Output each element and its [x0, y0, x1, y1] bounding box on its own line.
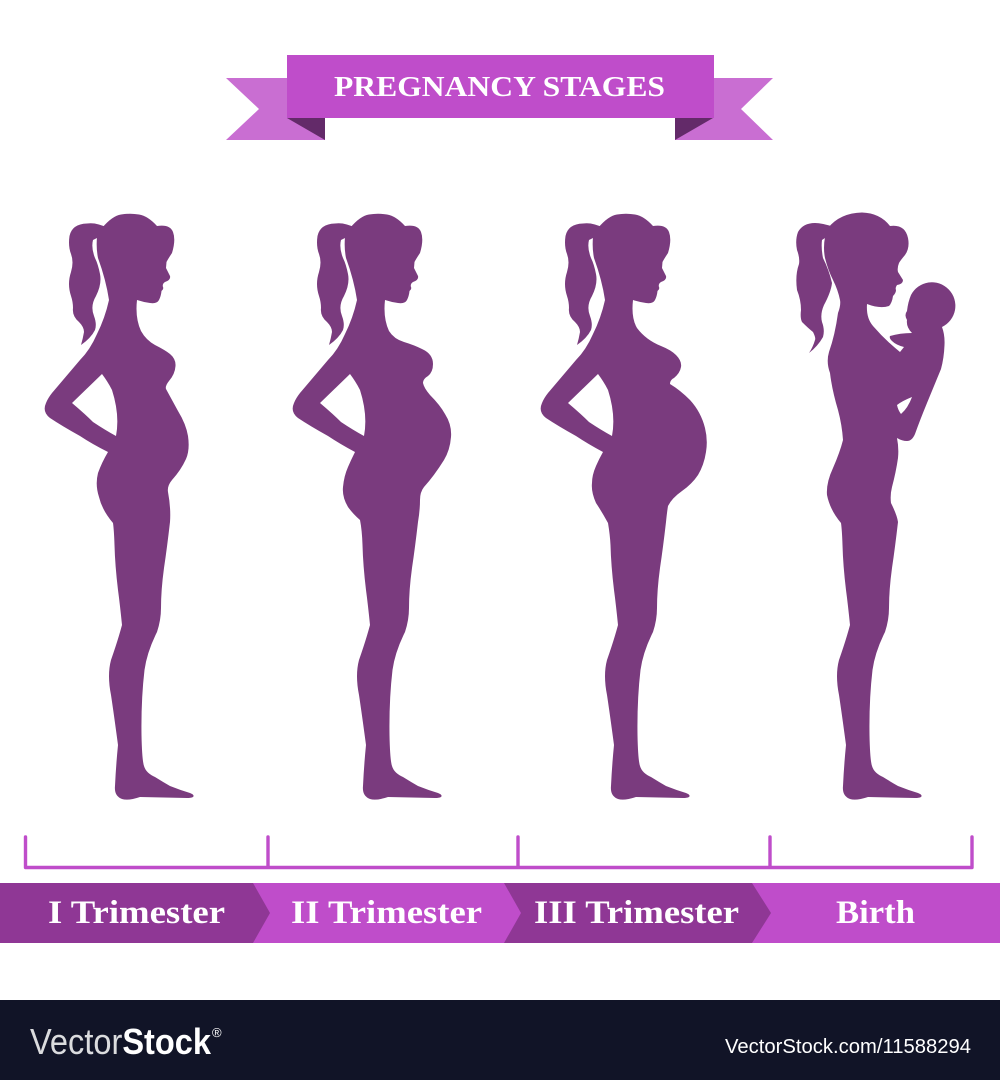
banner right fold	[675, 118, 713, 140]
title text: PREGNANCY STAGES	[334, 71, 665, 103]
label: II Trimester: II Trimester	[291, 895, 482, 931]
segment: III Trimester	[504, 883, 771, 943]
silhouette: second trimester	[293, 214, 451, 800]
footer id: VectorStock.com/11588294	[725, 1036, 971, 1058]
banner main band	[287, 55, 714, 118]
segment: I Trimester	[0, 883, 270, 943]
timeline bracket	[26, 837, 972, 868]
banner left fold	[287, 118, 325, 140]
silhouette: third trimester	[541, 214, 707, 800]
registered mark: ®	[212, 1025, 222, 1040]
banner right tail	[675, 78, 773, 140]
label: III Trimester: III Trimester	[534, 895, 739, 931]
ribbon light band	[0, 883, 1000, 943]
label: Birth: Birth	[836, 895, 915, 931]
label: I Trimester: I Trimester	[48, 895, 225, 931]
footer logo: VectorStock	[30, 1021, 212, 1062]
stage ribbon	[0, 883, 1000, 943]
footer bar	[0, 1000, 1000, 1080]
banner left tail	[226, 78, 325, 140]
silhouette: mother holding baby	[796, 212, 955, 800]
silhouette: first trimester	[45, 214, 194, 800]
footer background	[0, 1000, 1000, 1080]
title banner	[226, 55, 773, 140]
